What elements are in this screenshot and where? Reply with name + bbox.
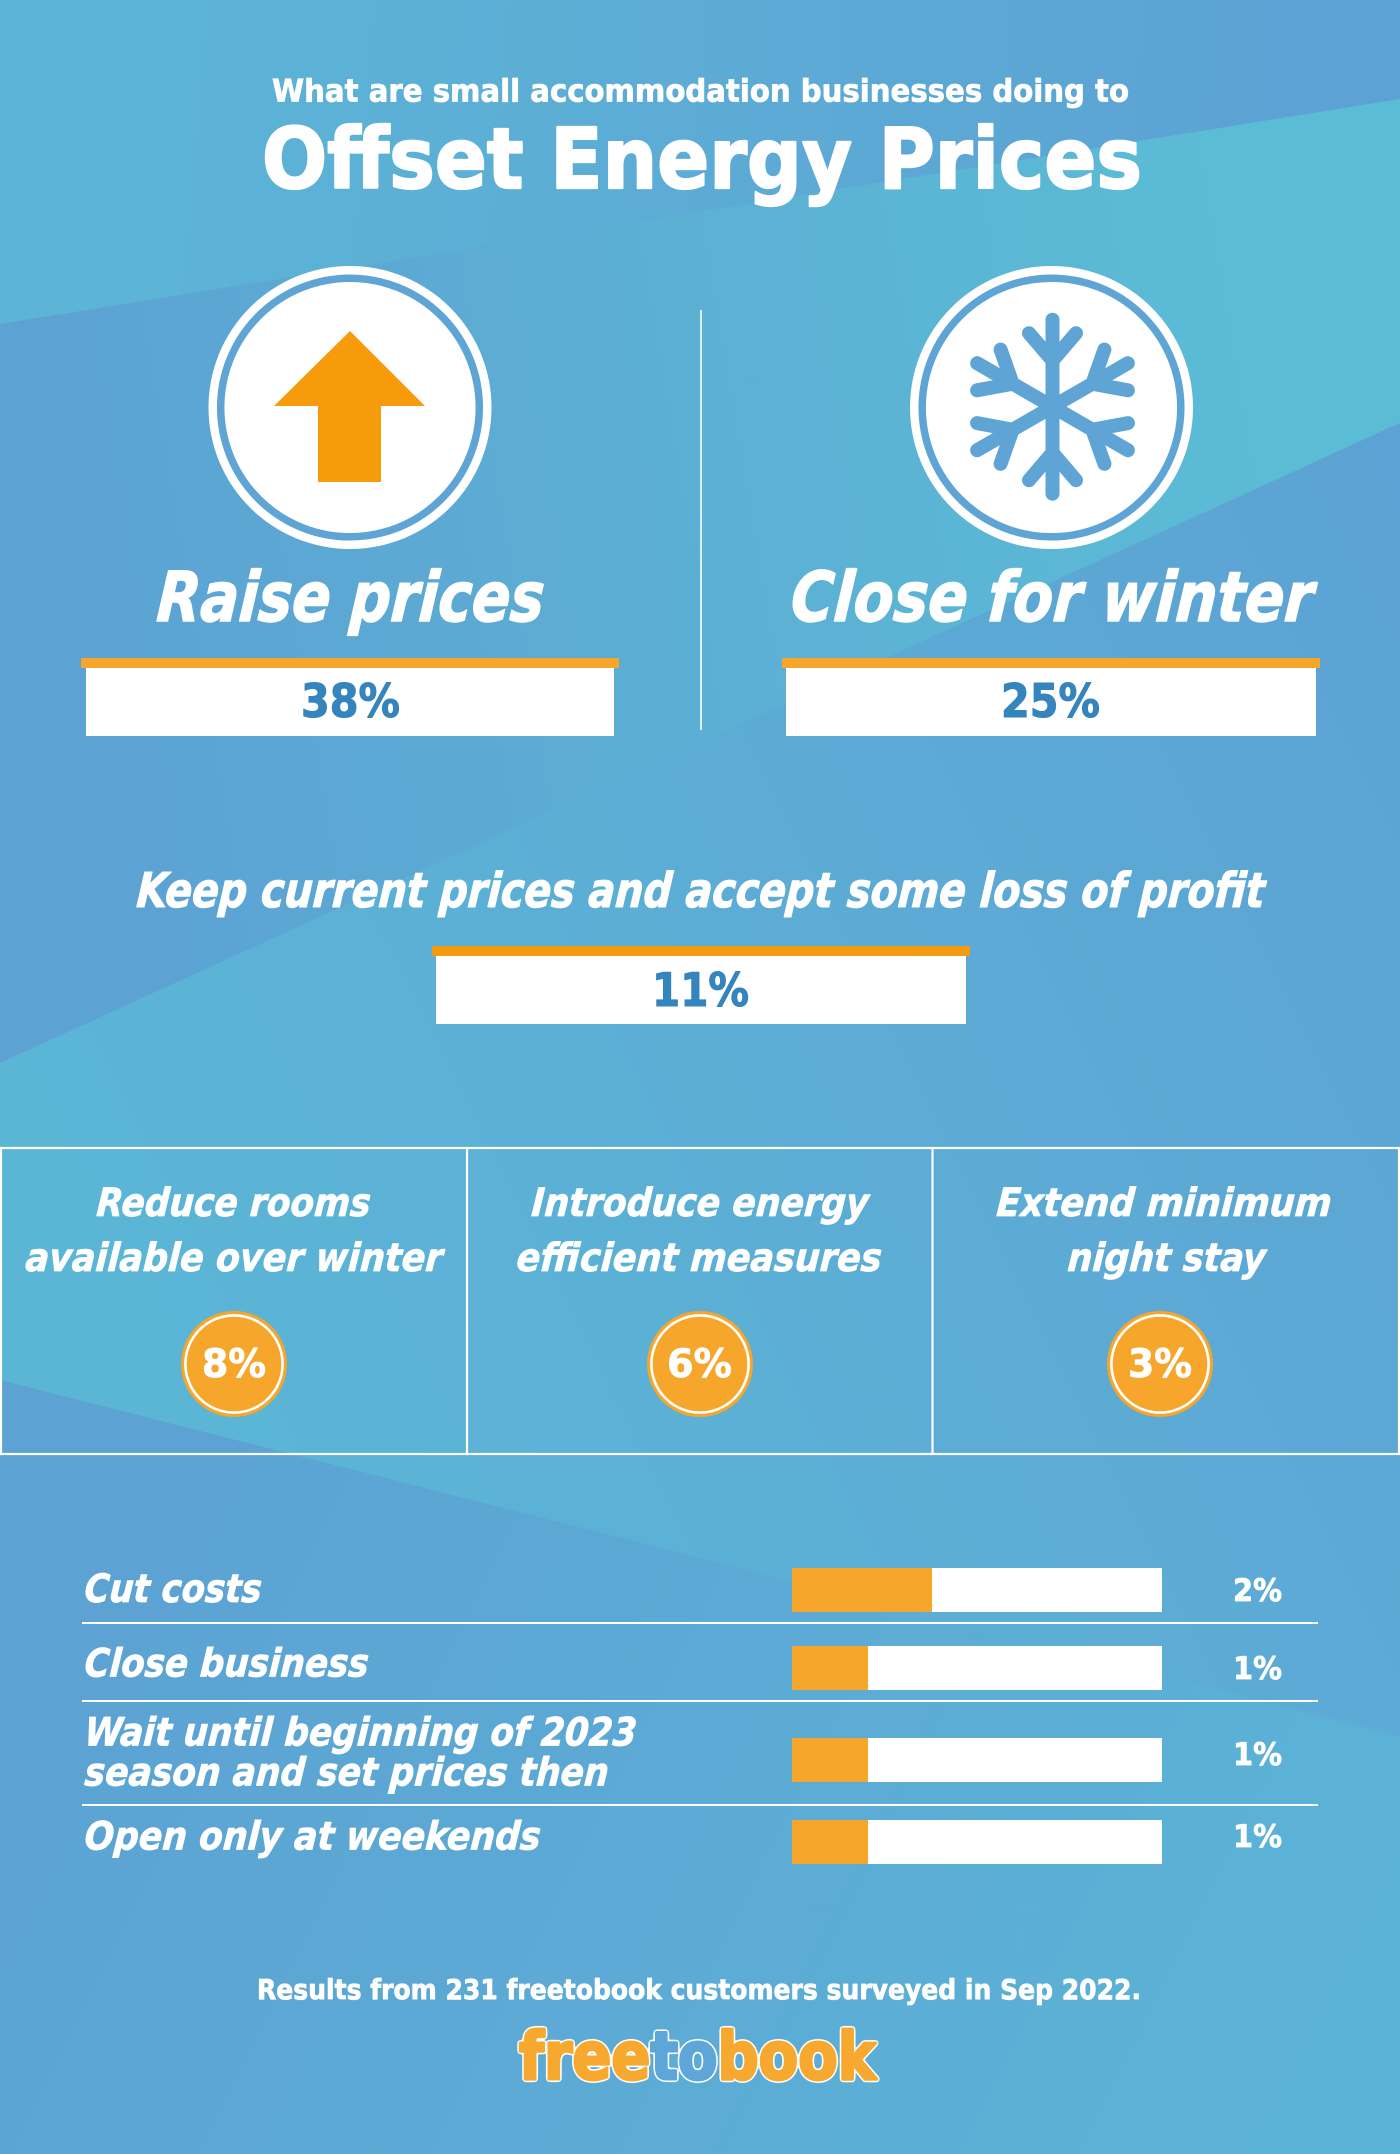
bar: 38% (81, 658, 619, 736)
row: wait until 2023: 1% (1233, 1737, 1282, 1773)
badge: 6%: 6% (667, 1341, 732, 1387)
bar: 25%: 25% (1001, 674, 1100, 728)
row: open only at weekends: Open only at weekends (83, 1815, 542, 1859)
label: close for winter: Close for winter (789, 558, 1319, 638)
cell: extend minimum: night stay (1066, 1236, 1269, 1281)
row: wait until 2023: season and set prices then (83, 1751, 610, 1795)
label: raise prices: Raise prices (155, 558, 547, 638)
cell: reduce rooms: Reduce rooms (95, 1181, 372, 1226)
bar: 38%: 38% (301, 674, 400, 728)
bar: 11%: 11% (652, 963, 749, 1017)
cell: energy efficient: efficient measures (515, 1236, 883, 1281)
panel: keep current prices (135, 863, 1269, 1024)
badge: 8%: 8% (202, 1341, 266, 1387)
row: wait until 2023 (83, 1711, 1282, 1795)
row: close business: Close business (83, 1642, 370, 1686)
divider (700, 310, 702, 730)
panel: raise prices (81, 266, 619, 736)
grid frame (1, 1148, 1399, 1454)
panel: three option grid (1, 1148, 1399, 1454)
footer note: Results from 231 freetobook customers surveyed in Sep 2022. (257, 1973, 1141, 2006)
row: close business (83, 1642, 1282, 1690)
row: wait until 2023: Wait until beginning of 2023 (83, 1711, 638, 1755)
row: close business: 1% (1233, 1651, 1282, 1687)
cell: energy efficient (515, 1181, 883, 1417)
badge: 3%: 3% (1128, 1341, 1192, 1387)
bar: 11% (432, 946, 970, 1024)
subtitle: What are small accommodation businesses doing to (272, 74, 1129, 110)
badge: 3% (1107, 1311, 1213, 1417)
bar chart: other responses (82, 1567, 1318, 1864)
row: cut costs: Cut costs (83, 1567, 263, 1612)
cell: reduce rooms: available over winter (24, 1236, 447, 1281)
cell: extend minimum (995, 1181, 1333, 1417)
icon: up arrow in circle (208, 266, 492, 549)
row: cut costs: 2% (1233, 1573, 1282, 1609)
icon: snowflake in circle (910, 266, 1193, 549)
row: open only at weekends (83, 1815, 1282, 1864)
cell: reduce rooms (24, 1181, 447, 1417)
cell: extend minimum: Extend minimum (995, 1181, 1333, 1226)
title: Offset Energy Prices (262, 110, 1142, 208)
badge: 6% (647, 1311, 753, 1417)
logo: freetobook: freetobook (519, 2018, 878, 2095)
row: cut costs (83, 1567, 1282, 1612)
panel: close for winter (782, 266, 1320, 736)
row: open only at weekends: 1% (1233, 1819, 1282, 1855)
badge: 8% (181, 1311, 287, 1417)
cell: energy efficient: Introduce energy (530, 1181, 872, 1226)
bar: 25% (782, 658, 1320, 736)
